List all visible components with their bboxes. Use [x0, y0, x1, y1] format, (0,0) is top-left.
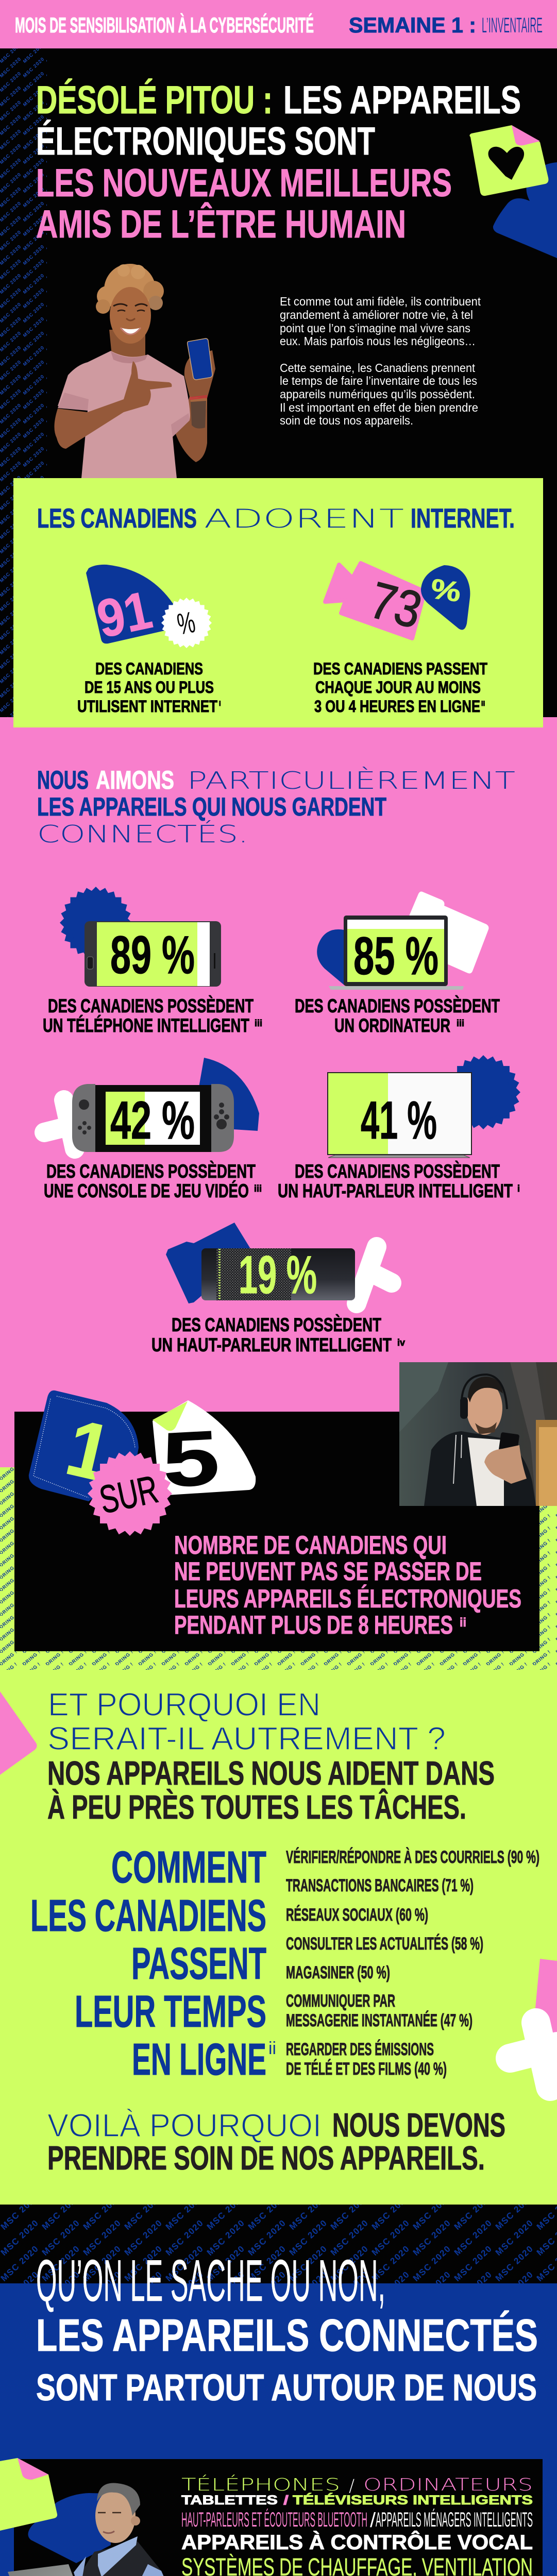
list: online activities: [286, 1848, 539, 2079]
stat: smart TV 41 percent: [278, 1055, 520, 1201]
panel: device list with man: [0, 2458, 543, 2576]
list: online activities: DE TÉLÉ ET DES FILMS (40 %): [286, 2059, 447, 2079]
heading: connected devices: NOUS: [37, 766, 89, 794]
panel: connected devices background: [0, 2205, 557, 2576]
stat: smartphone 89 percent: [43, 887, 262, 1036]
stat: game console 42 percent: [44, 1058, 262, 1201]
stat: 1 sur 5: [29, 1391, 256, 1536]
caption: iv: [397, 1337, 405, 1348]
panel: black hero: [0, 48, 557, 717]
stat captions: i: [219, 700, 221, 707]
caption: [43, 995, 262, 1036]
intro text: eux. Mais parfois nous les négligeons…: [280, 334, 476, 348]
icon: lime note: [0, 2458, 57, 2531]
stat: computer 85 percent: 85 %: [353, 926, 438, 986]
heading: how Canadians spend their time: LES CANADIENS: [30, 1891, 266, 1941]
device list: TÉLÉVISEURS INTELLIGENTS: [293, 2493, 533, 2507]
caption: UN ORDINATEUR: [334, 1015, 450, 1036]
panel: black one-in-five: [14, 1412, 539, 1651]
list: online activities: MAGASINER (50 %): [286, 1963, 390, 1982]
conclusion text: VOILÀ POURQUOI: [47, 2108, 322, 2144]
device list: ORDINATEURS: [363, 2475, 533, 2495]
photo: woman pointing at phone: [54, 264, 215, 478]
heading: ADORENT: [204, 504, 404, 534]
stat captions: [77, 659, 487, 716]
heading: how Canadians spend their time: EN LIGNE: [132, 2035, 266, 2084]
caption: iii: [254, 1183, 262, 1194]
stat: 1 sur 5: 1: [58, 1402, 120, 1499]
list: online activities: REGARDER DES ÉMISSIONS: [286, 2040, 434, 2059]
stat: smart TV 41 percent: 41 %: [361, 1091, 437, 1150]
heading: connected devices: AIMONS: [96, 766, 174, 794]
intro text: Et comme tout ami fidèle, ils contribuent: [280, 295, 481, 308]
photo: young man with headphones and phone: [399, 1362, 557, 1506]
stat: smart speaker 19 percent: 19 %: [239, 1245, 317, 1305]
panel: header band: [0, 0, 557, 48]
panel: lime background with DRING pattern: [0, 1467, 557, 2205]
heading: connected devices everywhere: [36, 2248, 538, 2409]
stat: computer 85 percent: [295, 891, 500, 1036]
intro text: Il est important en effet de bien prendre: [280, 401, 478, 414]
intro text: grandement à améliorer notre vie, à tel: [280, 308, 473, 321]
conclusion text: [47, 2106, 505, 2177]
caption: UN HAUT-PARLEUR INTELLIGENT: [151, 1334, 392, 1355]
caption: DES CANADIENS POSSÈDENT: [46, 1161, 256, 1182]
title: [36, 78, 521, 246]
stat captions: 3 OU 4 HEURES EN LIGNE: [314, 697, 480, 716]
photo: man with laptop: [8, 2483, 171, 2576]
stat: 73 percent: [325, 563, 470, 640]
heading: connected devices: LES APPAREILS QUI NOUS GARDENT: [37, 792, 386, 821]
caption: i: [517, 1183, 520, 1194]
panel: Canadians love the internet: [13, 478, 543, 727]
icon: note with heart: [469, 125, 548, 196]
icon: blue cloud shape: [493, 162, 557, 258]
heading: why else: ET POURQUOI EN: [48, 1687, 320, 1723]
stat captions: DES CANADIENS: [95, 659, 203, 678]
heading: why else: SERAIT-IL AUTREMENT ?: [47, 1721, 446, 1757]
stat: 1 sur 5: SUR: [96, 1467, 162, 1522]
stat: smart speaker 19 percent: [151, 1223, 405, 1355]
list: online activities: COMMUNIQUER PAR: [286, 1991, 395, 2011]
title: ÉLECTRONIQUES SONT: [36, 120, 375, 163]
device list: /: [349, 2476, 355, 2496]
stat: game console 42 percent: 42 %: [110, 1091, 195, 1150]
intro text: [280, 295, 481, 427]
device list: TABLETTES: [181, 2493, 278, 2507]
one-in-five statement: NOMBRE DE CANADIENS QUI: [174, 1531, 447, 1560]
caption: iii: [457, 1018, 464, 1028]
heading: why else: [47, 1687, 495, 1826]
heading: how Canadians spend their time: [30, 1842, 276, 2084]
campaign name: MOIS DE SENSIBILISATION À LA CYBERSÉCURITÉ: [15, 13, 314, 37]
caption: [151, 1314, 405, 1355]
caption: DES CANADIENS POSSÈDENT: [172, 1314, 381, 1335]
heading: connected devices: PARTICULIÈREMENT: [187, 767, 515, 794]
device list: [181, 2474, 533, 2576]
title: AMIS DE L’ÊTRE HUMAIN: [36, 202, 406, 246]
stat captions: DES CANADIENS PASSENT: [313, 659, 487, 678]
heading: how Canadians spend their time: ii: [268, 2039, 276, 2058]
caption: [295, 995, 500, 1036]
list: online activities: RÉSEAUX SOCIAUX (60 %): [286, 1905, 428, 1925]
icon: pink triangle: [0, 1691, 37, 1775]
intro text: Cette semaine, les Canadiens prennent: [280, 361, 476, 375]
caption: iii: [255, 1018, 262, 1028]
stat: 91 percent: %: [175, 605, 198, 641]
stat: 91 percent: [86, 565, 212, 649]
stat captions: CHAQUE JOUR AU MOINS: [315, 678, 481, 697]
device list: /: [283, 2493, 289, 2507]
one-in-five statement: PENDANT PLUS DE 8 HEURES: [174, 1611, 453, 1639]
caption: DES CANADIENS POSSÈDENT: [48, 995, 254, 1016]
stat: 73 percent: %: [429, 573, 463, 608]
stat captions: DE 15 ANS OU PLUS: [85, 678, 214, 697]
one-in-five statement: ii: [460, 1616, 466, 1630]
icon: blue shape behind man: [28, 2493, 111, 2563]
caption: UN TÉLÉPHONE INTELLIGENT: [43, 1015, 249, 1036]
heading: how Canadians spend their time: COMMENT: [111, 1842, 266, 1892]
heading: how Canadians spend their time: PASSENT: [131, 1939, 266, 1989]
stat: smartphone 89 percent: 89 %: [110, 925, 195, 985]
stat: 91 percent: 91: [92, 580, 157, 649]
heading: INTERNET.: [411, 503, 515, 534]
intro text: point que l’on s’imagine mal vivre sans: [280, 321, 470, 335]
device list: /: [370, 2509, 376, 2532]
heading: [37, 503, 515, 534]
stat: 73 percent: 73: [364, 571, 428, 640]
heading: LES CANADIENS: [37, 503, 197, 534]
caption: UNE CONSOLE DE JEU VIDÉO: [44, 1180, 249, 1201]
device list: APPAREILS À CONTRÔLE VOCAL: [181, 2530, 533, 2554]
device list: TÉLÉPHONES: [181, 2474, 340, 2495]
stat captions: UTILISENT INTERNET: [77, 697, 217, 716]
intro text: le temps de faire l’inventaire de tous les: [280, 374, 477, 387]
one-in-five statement: [174, 1531, 521, 1639]
icon: pink tab and white cross: [510, 1959, 557, 2087]
stat: 1 sur 5: 5: [160, 1414, 222, 1503]
week label: SEMAINE 1 :: [349, 13, 476, 37]
heading: how Canadians spend their time: LEUR TEMPS: [75, 1987, 266, 2037]
caption: [278, 1161, 520, 1201]
caption: [44, 1161, 262, 1201]
intro text: appareils numériques qu’ils possèdent.: [280, 387, 475, 401]
heading: connected devices: CONNECTÉS.: [37, 820, 248, 848]
heading: connected devices: [37, 766, 515, 848]
title: DÉSOLÉ PITOU :: [36, 78, 273, 122]
stat captions: ii: [481, 700, 485, 707]
intro text: soin de tous nos appareils.: [280, 414, 413, 427]
